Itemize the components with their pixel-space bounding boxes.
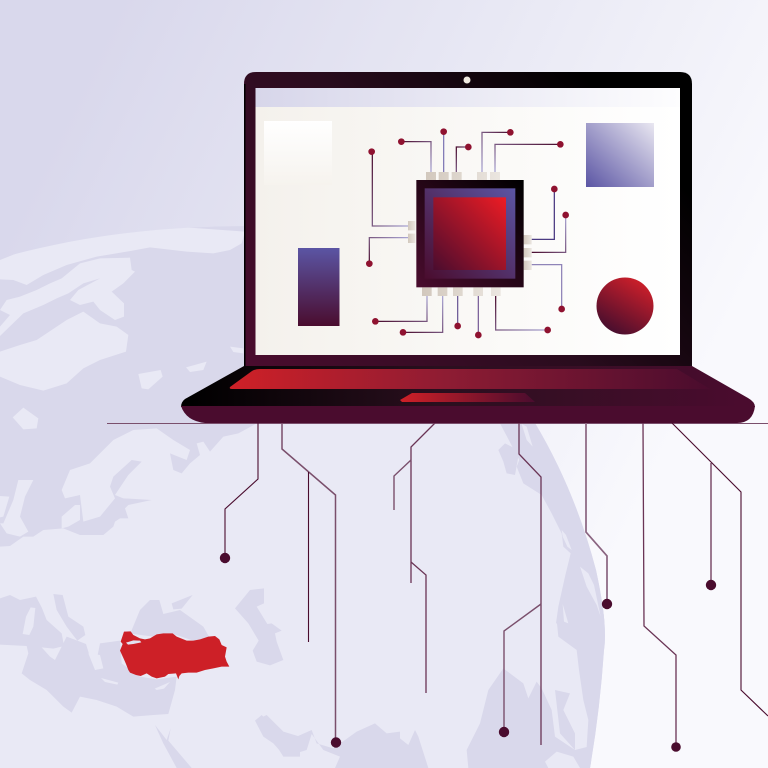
screen shape: vertical rectangle (298, 248, 340, 326)
webcam (464, 76, 470, 84)
polar ice band (0, 226, 245, 285)
europe and asia land mass with baltic inlet (0, 422, 633, 768)
trace end dots (366, 128, 569, 338)
sea of azov (172, 595, 193, 609)
dots (366, 128, 569, 338)
adriatic (53, 594, 85, 641)
chip outer body (416, 180, 524, 287)
trace top 5 (495, 144, 560, 172)
borneo (545, 752, 580, 768)
chip core (433, 197, 506, 270)
trace bottom 5 (375, 296, 427, 321)
trace right 1 (532, 189, 554, 239)
trace top 2 (442, 132, 446, 172)
mediterranean (0, 595, 177, 717)
laptop lid frame (244, 72, 692, 367)
circuit trace 4 (411, 423, 435, 583)
trace bottom 3 (456, 296, 460, 326)
node 1 (220, 553, 230, 563)
globe ocean disc (58, 226, 255, 535)
red sea (155, 725, 192, 768)
turkey outline (120, 631, 229, 679)
persian gulf west (264, 715, 300, 756)
circuit trace 7 (519, 423, 541, 745)
node 5 (706, 580, 716, 590)
sakhalin island (562, 530, 572, 550)
laptop base top (181, 366, 755, 407)
left pins (408, 221, 415, 243)
indian ocean and pacific seas (255, 567, 605, 768)
circuit trace 2 (282, 423, 336, 741)
bay of bengal (467, 668, 593, 768)
trace bottom 1 (496, 296, 548, 330)
horizontal shelf line (107, 422, 768, 424)
screen shape: circle (596, 278, 654, 334)
left lid edge (244, 84, 246, 367)
black sea (131, 600, 209, 641)
keyboard (230, 369, 710, 389)
node 2 (331, 737, 341, 748)
pacific limb band (498, 424, 602, 624)
mediterranean islands (23, 607, 170, 690)
top pins (426, 172, 500, 181)
node 6 (671, 742, 681, 752)
trace left 1 (372, 152, 408, 226)
circuit trace 9 (586, 423, 607, 602)
circuit trace 8 (504, 604, 541, 730)
limb ocean (500, 424, 602, 624)
trace top 4 (482, 132, 510, 172)
corsica and sardinia (23, 607, 35, 635)
screen shape: blue square (586, 123, 654, 187)
trace left 2 (369, 238, 408, 264)
node 3 (499, 727, 509, 737)
trace right 2 (532, 215, 566, 252)
arabian sea (255, 715, 428, 768)
greenland (0, 312, 128, 391)
chip middle layer (425, 188, 515, 279)
pacific islands (545, 567, 601, 768)
circuit trace 1 (225, 423, 258, 556)
japan (580, 567, 601, 617)
bottom pins (422, 287, 501, 296)
northern coastal sea (498, 443, 518, 475)
cyprus (155, 682, 170, 690)
globe (0, 226, 605, 768)
small arctic island (230, 347, 243, 353)
circuit trace 11 (672, 423, 768, 716)
franz josef land (186, 362, 207, 372)
screen (256, 88, 680, 355)
trackpad (400, 393, 535, 402)
circuit trace 10 (643, 423, 676, 745)
korean islet (563, 604, 568, 623)
south china sea (555, 690, 575, 750)
trace top 3 (456, 147, 468, 172)
screen shape: pale box (264, 121, 332, 185)
circuit end nodes (220, 553, 716, 752)
trace right 3 (532, 265, 562, 309)
eurasia continent (0, 422, 633, 768)
svalbard (138, 370, 163, 389)
circuit trace 3 (308, 472, 310, 642)
sea of marmara (126, 640, 141, 645)
circuit trace 12 (710, 463, 712, 583)
caspian sea (235, 588, 283, 665)
processor chip diagram (366, 128, 569, 338)
trace bottom 2 (476, 296, 480, 335)
arctic and north america land (0, 226, 245, 429)
circuit trace 6 (411, 562, 426, 693)
screen top bar (256, 88, 680, 107)
circuit trace 5 (394, 460, 411, 510)
circuit lines below laptop (107, 423, 768, 745)
mediterranean, black and caspian seas (0, 588, 300, 768)
iceland (13, 408, 38, 429)
crete (101, 678, 118, 685)
laptop base front (181, 406, 755, 423)
trace bottom 4 (403, 296, 443, 332)
node 4 (602, 599, 612, 609)
laptop (181, 72, 755, 423)
canadian archipelago (0, 258, 135, 336)
chip traces (369, 132, 566, 335)
right pins (524, 235, 532, 270)
chip pins (408, 172, 532, 296)
greece (88, 653, 103, 670)
turkey highlighted in red (120, 631, 229, 679)
ireland (0, 496, 9, 517)
kamchatka island strip (522, 424, 533, 447)
denmark (62, 505, 80, 528)
trace top 1 (401, 142, 431, 172)
western pacific (557, 624, 605, 760)
great britain (0, 480, 33, 537)
